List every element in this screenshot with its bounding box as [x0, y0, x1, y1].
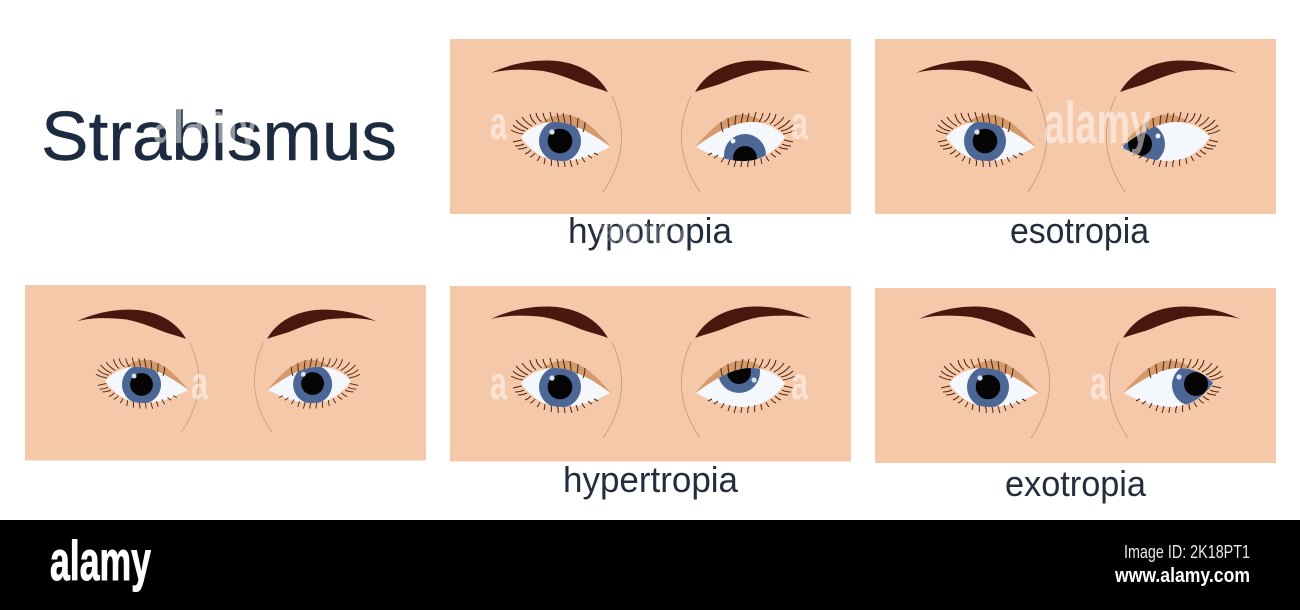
panel: hypertropia — [450, 286, 851, 462]
watermarks: a — [490, 97, 507, 149]
image id: Image ID: 2K18PT1 — [1124, 542, 1250, 562]
watermarks: a — [191, 357, 208, 409]
watermarks: a — [791, 97, 808, 149]
watermarks: alamy — [153, 91, 258, 156]
footer bar — [0, 520, 1300, 610]
label: exotropia: exotropia — [1005, 463, 1147, 504]
face: hypertropia eyes and brows — [491, 306, 812, 438]
icon: right eye deviated upward — [719, 368, 760, 393]
watermarks: a — [1090, 357, 1107, 409]
face: esotropia eyes and brows — [916, 60, 1237, 192]
watermarks — [153, 91, 1151, 409]
icon: right eye looking straight — [293, 365, 332, 404]
panel: exotropia — [875, 288, 1276, 463]
watermarks: a — [490, 357, 507, 409]
icon: right eye deviated inward — [1123, 126, 1165, 160]
footer logo: alamy — [50, 529, 151, 592]
label: hypertropia: hypertropia — [563, 459, 739, 500]
face: normal eyes and brows — [77, 310, 376, 432]
website: www.alamy.com — [1114, 565, 1250, 587]
watermarks: a — [791, 357, 808, 409]
title: Strabismus — [41, 97, 397, 175]
watermarks: alamy — [1044, 91, 1151, 156]
panel: normal eyes — [25, 285, 426, 460]
panel: esotropia — [875, 39, 1276, 214]
panel: hypotropia — [450, 39, 851, 214]
face: exotropia eyes and brows — [919, 306, 1240, 438]
face: hypotropia eyes and brows — [491, 60, 812, 192]
label: esotropia: esotropia — [1010, 210, 1150, 251]
watermarks: alamy — [598, 210, 688, 251]
label: hypotropia: hypotropia — [568, 210, 733, 251]
icon: right eye deviated downward — [724, 134, 766, 161]
icon: right eye deviated outward — [1172, 368, 1213, 405]
